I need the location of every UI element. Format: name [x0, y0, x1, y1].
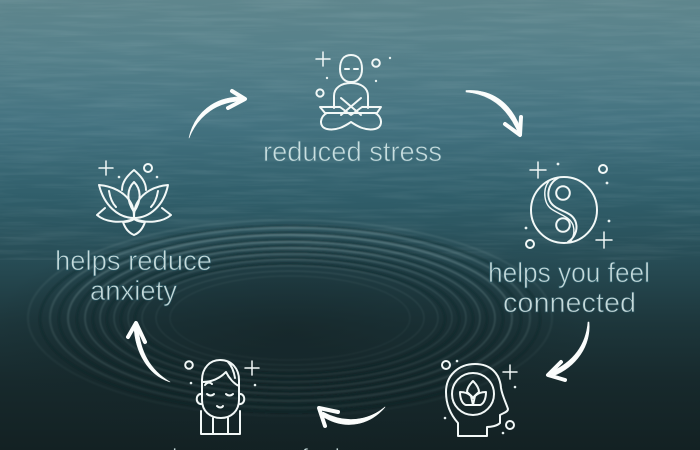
icon: lotus flower — [97, 161, 171, 235]
label: helps you feel connected: helps you feel — [488, 257, 650, 288]
label: helps reduce anxiety: helps reduce — [55, 245, 212, 276]
arrow: anxiety to stress — [189, 91, 245, 138]
step: calm mind — [428, 360, 528, 450]
icon: face with eyes closed — [185, 360, 259, 434]
water ripples — [28, 220, 552, 416]
icon: yin yang — [525, 162, 612, 248]
label: reduced stress: reduced stress — [263, 136, 442, 167]
step: lowers feelings — [172, 360, 340, 450]
step: reduced stress — [263, 52, 442, 167]
arrow: stress to connected — [466, 90, 521, 135]
arrow: face to anxiety — [128, 323, 170, 382]
label: helps reduce anxiety — [55, 245, 212, 306]
label: helps you feel connected: connected — [503, 287, 636, 318]
arrow: mind to face — [319, 407, 385, 426]
label: helps you feel connected — [488, 257, 650, 318]
step: helps you feel connected — [488, 162, 650, 318]
icon: meditating figure — [316, 52, 391, 129]
icon: head with lotus — [442, 360, 517, 436]
step: helps reduce anxiety — [55, 161, 212, 306]
label: helps reduce anxiety: anxiety — [90, 275, 177, 306]
arrow: connected to mind — [548, 322, 589, 380]
